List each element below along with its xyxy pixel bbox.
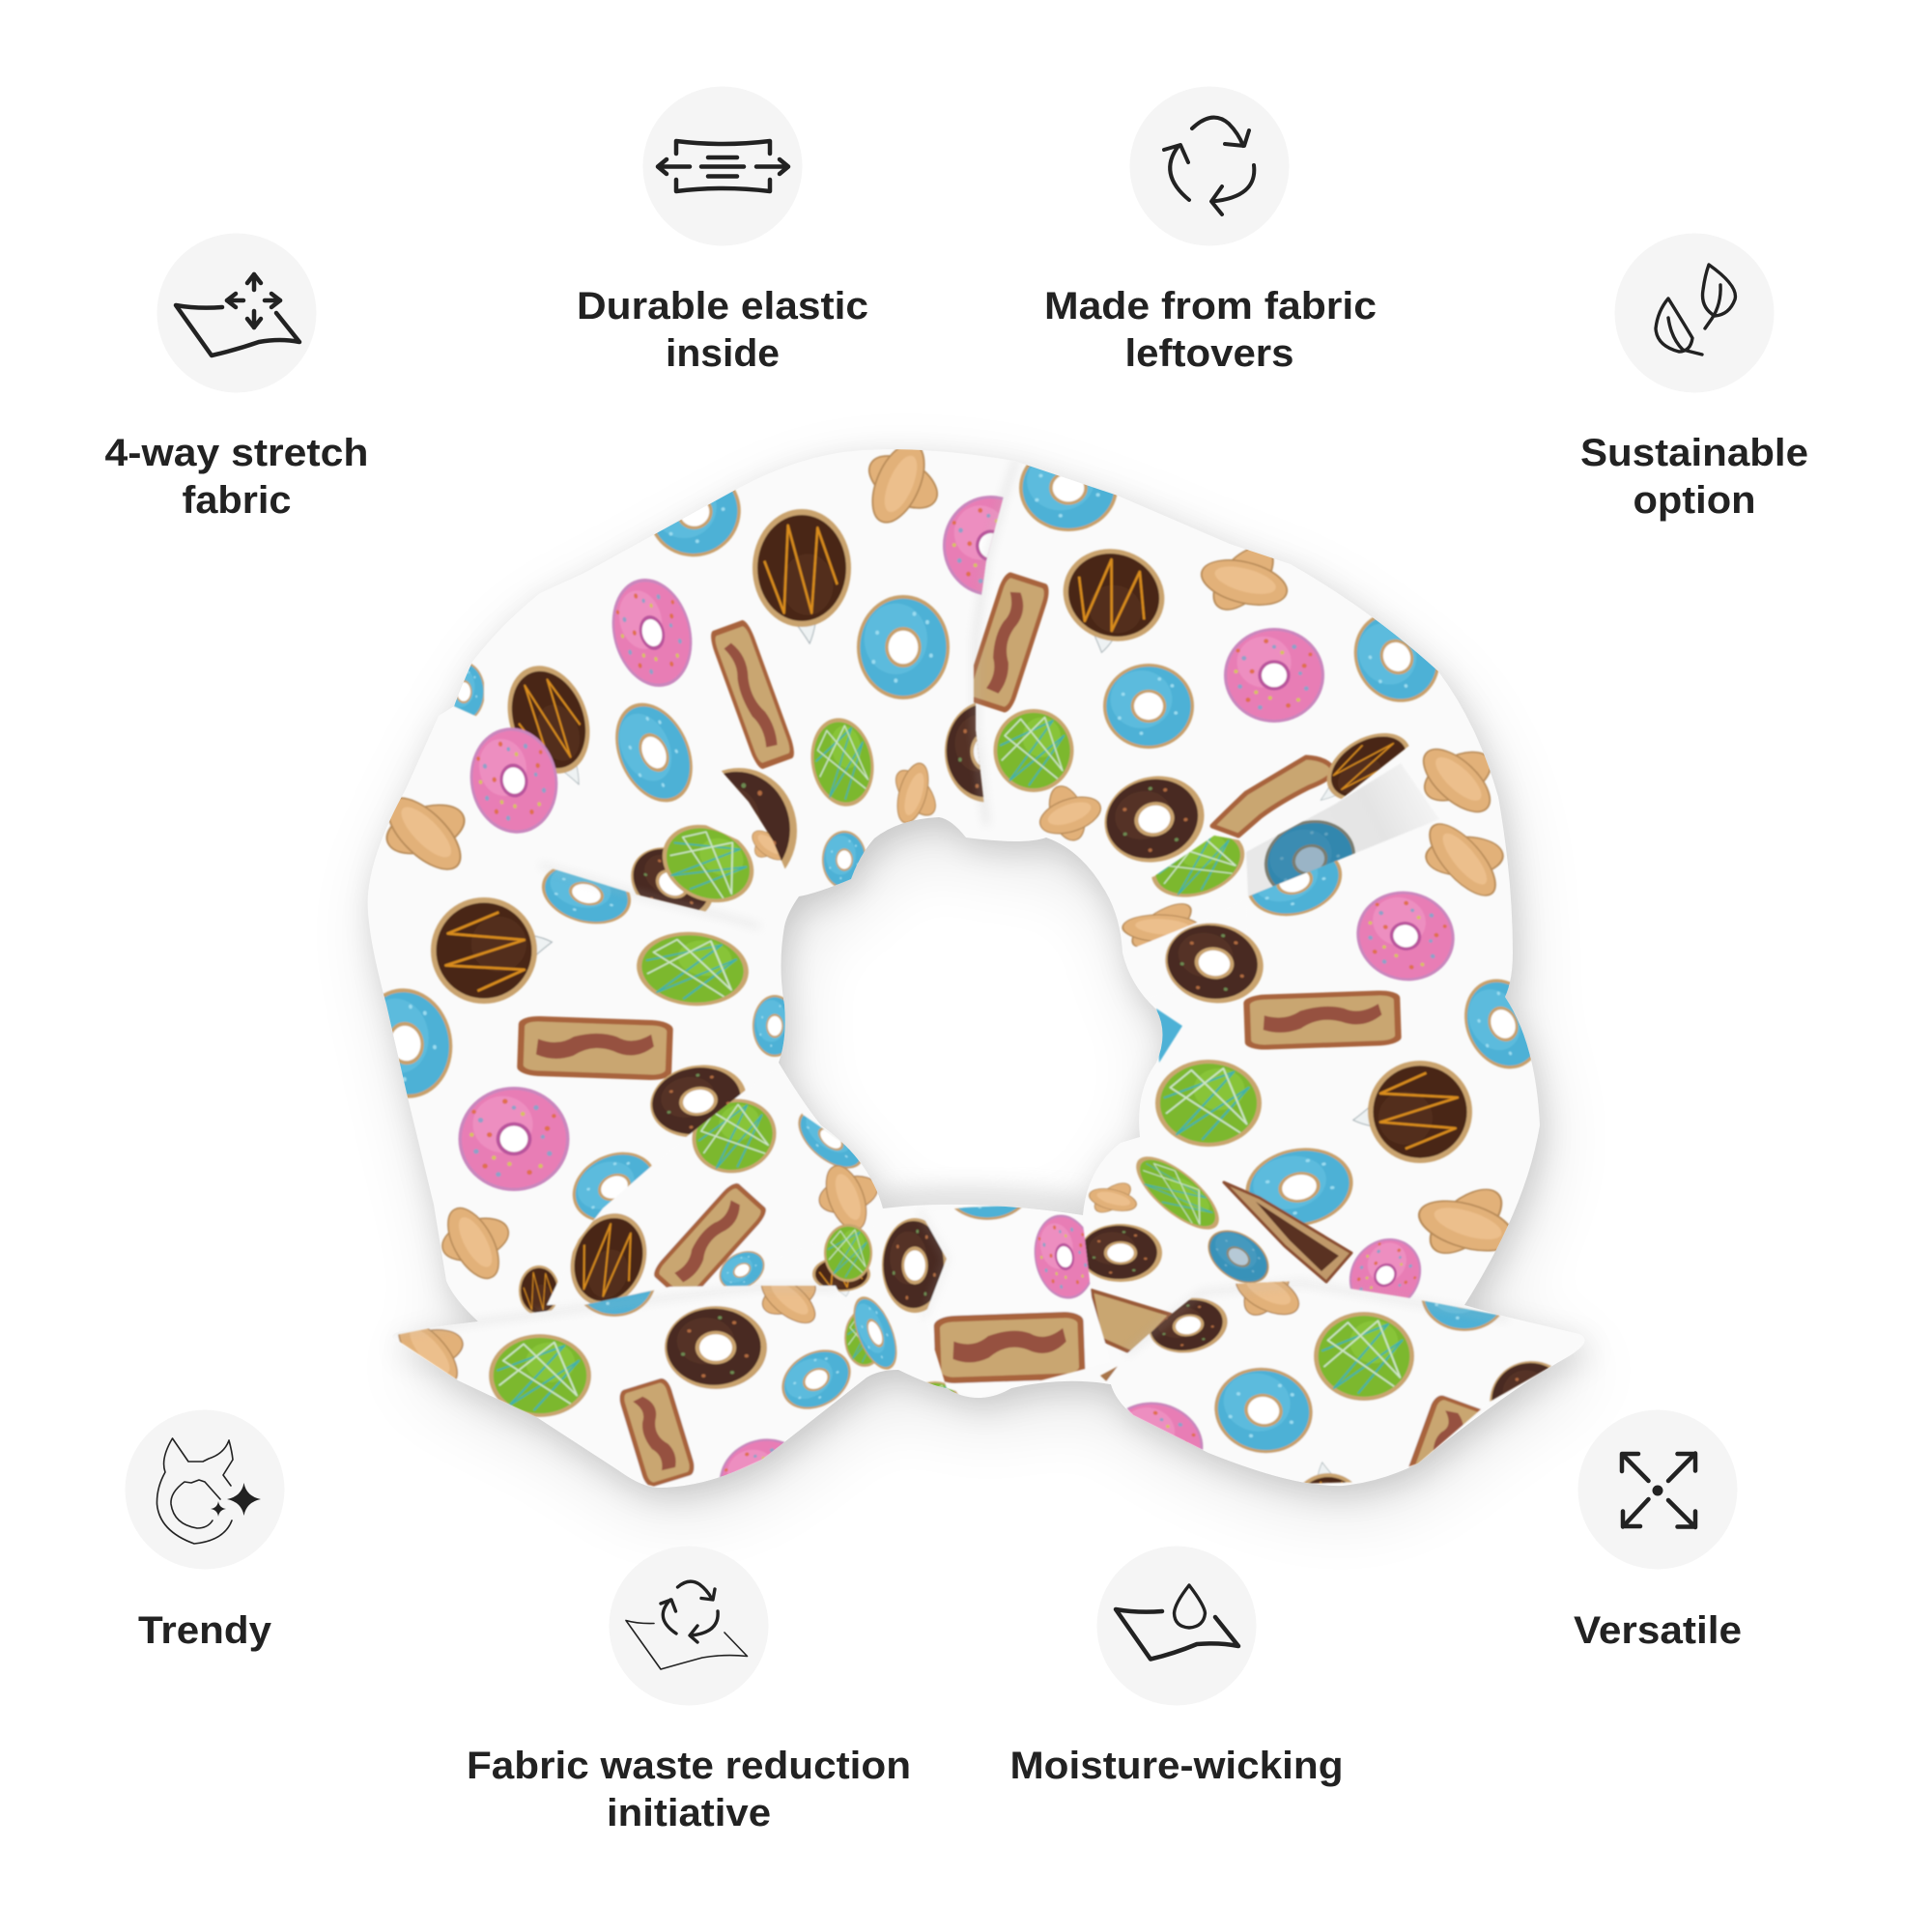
label: Fabric waste reduction [467, 1745, 911, 1787]
chocolate donut right centre [1094, 765, 1214, 873]
label: Durable elastic [577, 285, 868, 327]
donut blue right [1338, 596, 1456, 718]
blue right tail [1208, 1360, 1320, 1461]
blue donut lower half [1239, 836, 1350, 926]
donut blue top left [653, 489, 742, 558]
icon: recycling arrows [1164, 118, 1254, 214]
cast shadow wide [376, 474, 1592, 1513]
twist upper centre [895, 761, 937, 823]
donut pink right lower [1347, 880, 1464, 992]
bacon at top fold [963, 570, 1052, 715]
twist upper right [1184, 529, 1303, 633]
green near knot [824, 1224, 872, 1282]
twist small knot [1081, 1176, 1145, 1223]
feature: fabric waste reduction initiative [467, 1546, 911, 1834]
donut pink at top fold [939, 492, 1043, 600]
label: Moisture-wicking [1010, 1745, 1343, 1787]
icon badge [1130, 87, 1289, 245]
blue lens on right tail [1421, 1258, 1508, 1331]
round chocolate bottom [1291, 1463, 1366, 1550]
round chocolate upper right [1046, 535, 1178, 668]
blue lens on knot [941, 1147, 1034, 1220]
feature: versatile [1574, 1410, 1742, 1652]
icon badge [1615, 234, 1774, 392]
chocolate donut squeezed at fold [944, 702, 985, 803]
feature: made from fabric leftovers [1044, 87, 1377, 375]
bacon on strip [650, 1179, 770, 1305]
twist on tail [747, 1263, 831, 1334]
round chocolate left [506, 665, 591, 785]
chocolate donut under fold [618, 833, 726, 935]
green cut at fold [1142, 818, 1254, 909]
green on strip [684, 1090, 784, 1182]
donut pink behind wedge [1334, 1224, 1436, 1326]
patterns on strip [554, 1090, 896, 1329]
green right lower [1155, 1060, 1262, 1147]
donut pink upper right [1224, 628, 1324, 723]
chocolate donut above strip [644, 1058, 753, 1145]
chocolate donut right tail tip [1478, 1350, 1586, 1456]
feature: moisture-wicking [1010, 1546, 1343, 1787]
green donut top [810, 717, 875, 808]
donut blue right edge [1450, 966, 1556, 1082]
twist lower left [418, 1187, 529, 1296]
green under knot [911, 1381, 959, 1420]
green leaf [1125, 1145, 1230, 1241]
right bow tail fabric [1104, 1281, 1588, 1484]
icon: arrows radiating from dot [1622, 1453, 1695, 1527]
blue lens on tail [573, 1243, 656, 1317]
icon: scrunchie with sparkles [156, 1438, 261, 1544]
icon badge [156, 234, 317, 392]
donut blue left edge [351, 981, 461, 1105]
label: Versatile [1574, 1609, 1742, 1652]
twist on strip [797, 1147, 896, 1246]
round chocolate top [753, 509, 851, 643]
bacon piece beside knot [1092, 1291, 1171, 1353]
twist on right tail [1224, 1249, 1310, 1333]
chocolate donut right lower [1159, 916, 1269, 1010]
blue fragment inner right [1156, 1009, 1182, 1063]
label: Sustainable [1580, 432, 1808, 474]
round chocolate large left [431, 897, 552, 1004]
twist right upper [1405, 731, 1510, 826]
icon badge [1578, 1410, 1737, 1569]
twist tail tip [374, 1303, 483, 1400]
bacon tiny under knot [1100, 1360, 1129, 1389]
feature: trendy [126, 1410, 284, 1652]
icon: fabric with four arrows [176, 274, 299, 355]
cast shadow near [373, 459, 1589, 1497]
green large left [634, 927, 752, 1010]
label: inside [666, 332, 780, 375]
label: fabric [182, 479, 292, 522]
green oval under fold [650, 810, 766, 917]
round chocolate right lower [1353, 1061, 1472, 1163]
pink on knot [1028, 1209, 1101, 1304]
feature: sustainable option [1580, 234, 1808, 522]
icon: two leaves [1656, 265, 1735, 355]
dark fragments behind bow [812, 1257, 870, 1296]
chocolate donut tail [665, 1306, 767, 1389]
icon: fabric with recycling arrows [626, 1581, 748, 1669]
label: 4-way stretch [104, 432, 369, 474]
pink tail [708, 1427, 818, 1529]
blue squeezed at knot [844, 1291, 906, 1376]
blue cut by fold [535, 854, 638, 933]
soft fold shadows [391, 461, 1506, 1353]
green right of fold [993, 709, 1074, 792]
blue arch above strip [561, 1139, 668, 1236]
donut blue top right [1019, 444, 1118, 531]
icon badge [126, 1410, 284, 1569]
bacon bar top [707, 618, 798, 771]
fabric base [368, 449, 1584, 1488]
bacon bar left [517, 1015, 673, 1081]
round chocolate small [519, 1265, 559, 1322]
dark blue donut in fold [1253, 808, 1367, 912]
blue fragment behind bow [712, 1243, 772, 1297]
dark blue fragment [1198, 1219, 1279, 1294]
fabric patch over twist [1122, 896, 1248, 1005]
blue small inner [822, 831, 867, 889]
bacon on knot [933, 1311, 1086, 1384]
left bow tail fabric [391, 1286, 869, 1488]
label: Made from fabric [1044, 285, 1377, 327]
donut blue upper right centre [1103, 664, 1194, 749]
pink right tail [1098, 1391, 1212, 1495]
donut pink lower left [458, 1087, 570, 1191]
donut pink left [462, 721, 566, 840]
twist flat [1109, 891, 1215, 964]
feature: 4-way stretch fabric [104, 234, 369, 522]
donut pink top [611, 578, 694, 688]
label: leftovers [1124, 332, 1294, 375]
icon: fabric with water drop [1116, 1585, 1238, 1660]
patterns on left tail [374, 1243, 862, 1529]
round chocolate squeezed [1304, 720, 1423, 821]
round chocolate on strip [554, 1203, 659, 1329]
icon: elastic stretching [658, 141, 788, 191]
green tail [489, 1334, 591, 1417]
donut blue left [614, 701, 694, 804]
knot centre fabric [921, 1205, 1111, 1398]
blue fragment far left [442, 662, 485, 722]
bacon right tail [1403, 1393, 1495, 1505]
icon badge [643, 87, 802, 245]
green behind blue at knot [844, 1309, 885, 1367]
bacon bar right [1243, 990, 1402, 1050]
icon badge [1097, 1546, 1256, 1706]
shaded fold band [1246, 763, 1439, 896]
bacon tail [616, 1377, 697, 1489]
donut blue lower right [1239, 1140, 1359, 1235]
chocolate donut beside knot [1079, 1224, 1162, 1282]
donut blue inner edge [753, 995, 797, 1057]
twist lower right [1403, 1173, 1530, 1275]
chocolate left of knot [882, 1218, 948, 1313]
feature: durable elastic inside [577, 87, 868, 375]
product: donut-print scrunchie with bow [351, 427, 1592, 1550]
patterns on right tail [1098, 1249, 1586, 1550]
donut blue upper centre [857, 595, 950, 699]
bacon squeezed [1212, 757, 1334, 836]
twist top [845, 427, 955, 538]
patterns on knot [933, 1147, 1101, 1384]
blue tail [771, 1338, 862, 1421]
small chocolate donut on tail [1145, 1292, 1232, 1359]
printed pattern, clipped to the fabric [383, 449, 1551, 1488]
twist far left [362, 778, 487, 887]
chocolate crescent [681, 768, 797, 894]
twist small inner [748, 823, 790, 866]
green right tail [1314, 1312, 1414, 1401]
label: initiative [607, 1792, 771, 1834]
twist right lower [1400, 804, 1526, 914]
strip fabric left of knot [547, 1066, 879, 1305]
twist small right of fold [1022, 769, 1116, 861]
blue arch on strip [787, 1097, 874, 1180]
label: Trendy [138, 1609, 272, 1652]
shadow above knot [883, 1198, 1087, 1208]
icon badge [609, 1546, 769, 1706]
bacon wedge [1224, 1182, 1351, 1282]
label: option [1633, 479, 1756, 522]
